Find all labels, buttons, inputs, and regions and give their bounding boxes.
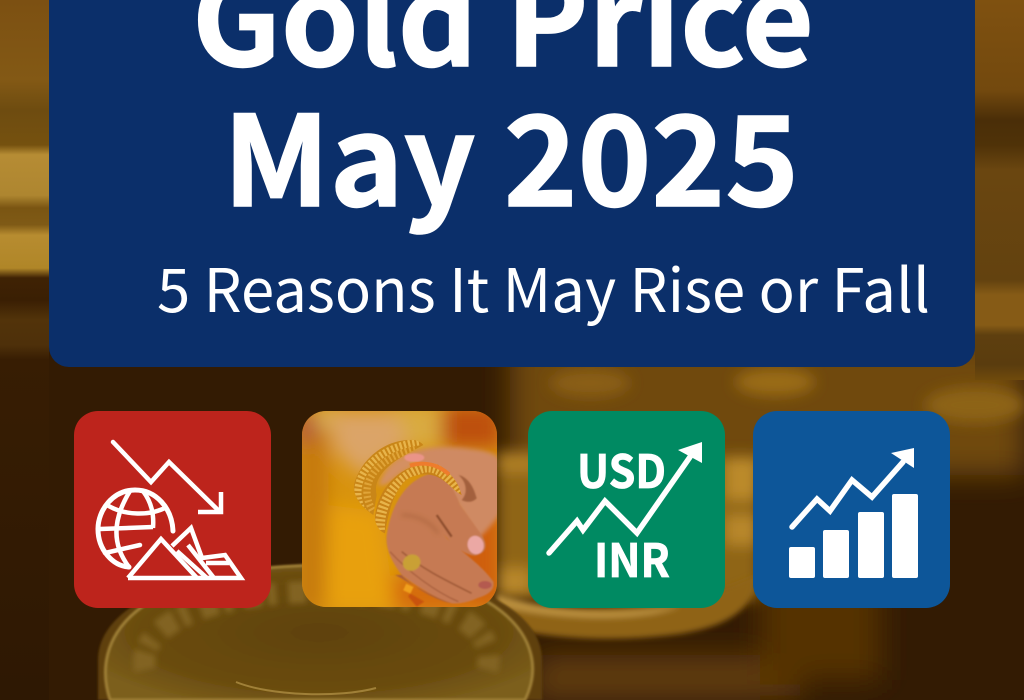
nails	[466, 534, 484, 555]
icon: globe, pyramids and falling arrow	[74, 411, 271, 608]
main coin	[98, 565, 542, 700]
subtitle: 5 Reasons It May Rise or Fall	[157, 243, 930, 330]
front hand	[386, 473, 494, 603]
photo: hand with gold bangles	[302, 411, 497, 607]
heading: May 2025: May 2025	[223, 61, 799, 242]
back hand	[378, 447, 502, 538]
label: USD: USD	[577, 436, 666, 502]
title panel	[49, 0, 975, 367]
second coin	[497, 575, 755, 639]
label: INR: INR	[594, 525, 670, 591]
icon: USD INR exchange chart	[528, 411, 725, 608]
bangles	[354, 440, 423, 515]
gold ornament below hand	[403, 584, 413, 594]
ring	[402, 554, 421, 572]
side strips	[0, 0, 49, 357]
arrow: rising line	[549, 442, 702, 553]
icon: rising bar chart	[753, 411, 950, 608]
arrow: rising line	[792, 448, 914, 527]
